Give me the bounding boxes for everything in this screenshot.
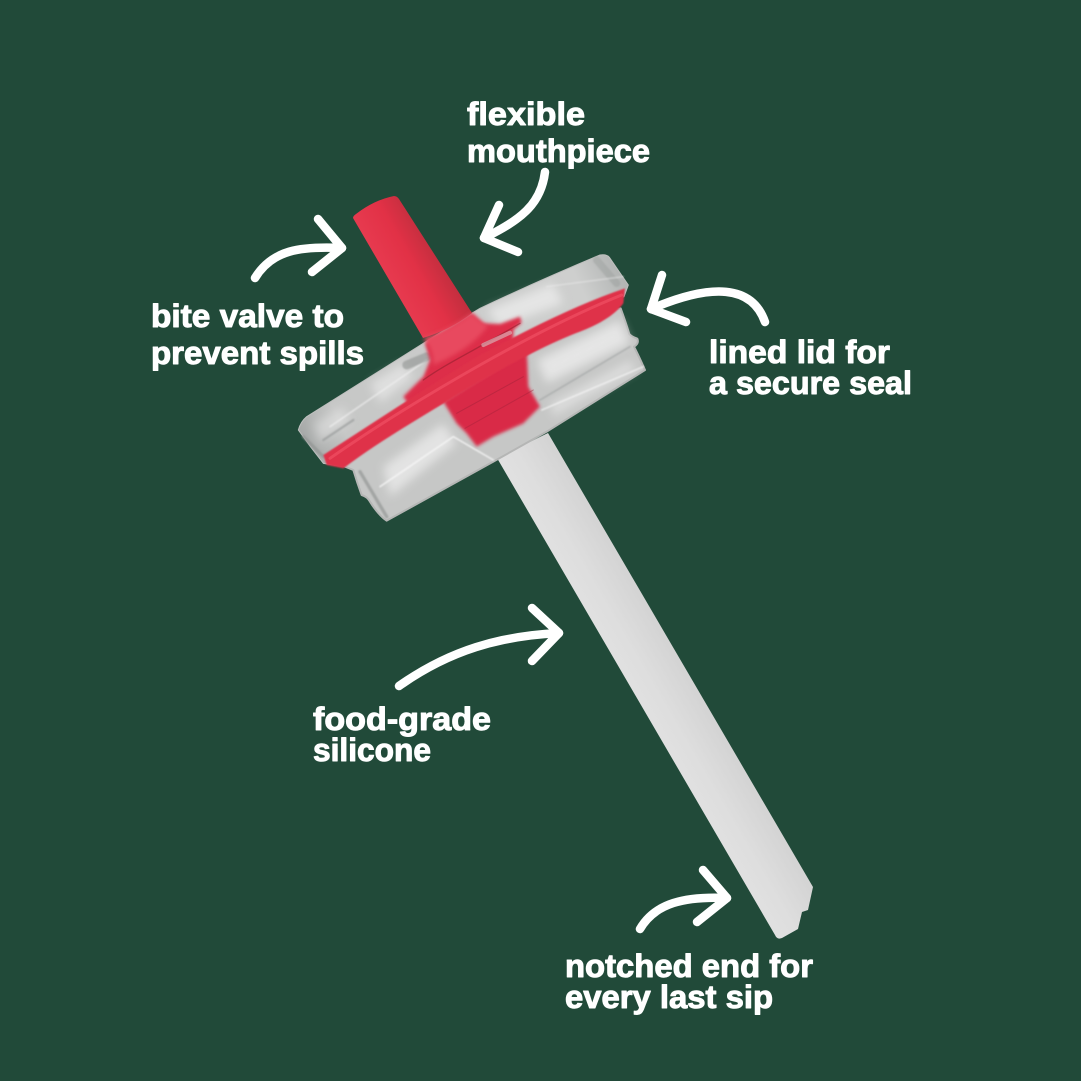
label: notched end: every last sip <box>565 979 773 1015</box>
red liner patches <box>403 313 540 447</box>
label: bite valve: bite valve to <box>151 298 344 334</box>
label: flexible mouthpiece <box>467 96 650 169</box>
arrow: flexible mouthpiece <box>484 172 545 252</box>
red band <box>323 288 625 468</box>
label: lined lid: a secure seal <box>709 365 912 401</box>
silicone straw <box>497 433 813 939</box>
mouthpiece base flare <box>423 313 488 365</box>
label: food-grade silicone <box>313 701 491 768</box>
lid shaded details <box>303 260 643 517</box>
label: flexible mouthpiece: flexible <box>467 96 585 132</box>
upper patch <box>403 313 522 407</box>
band ribs <box>330 295 622 458</box>
label: lined lid: lined lid for <box>709 334 890 370</box>
arrow: notched end <box>640 870 727 929</box>
label: notched end <box>565 948 813 1015</box>
flexible red mouthpiece <box>353 196 472 338</box>
label: bite valve: prevent spills <box>151 335 364 371</box>
arrow: food-grade silicone <box>399 608 559 686</box>
lower patch <box>443 348 540 447</box>
arrow: bite valve <box>255 219 342 278</box>
label: bite valve <box>151 298 364 371</box>
lid group drawn in zoom coordinates <box>298 255 645 521</box>
product: straw and lid <box>298 196 813 939</box>
lid upper rim <box>298 255 628 467</box>
arrow: lined lid <box>651 275 765 322</box>
label: flexible mouthpiece: mouthpiece <box>467 133 650 169</box>
lid highlights <box>313 283 637 497</box>
label: food-grade silicone: food-grade <box>313 701 491 737</box>
label: notched end: notched end for <box>565 948 813 984</box>
label: lined lid <box>709 334 912 401</box>
lid lower body <box>337 308 645 521</box>
label: food-grade silicone: silicone <box>313 732 431 768</box>
